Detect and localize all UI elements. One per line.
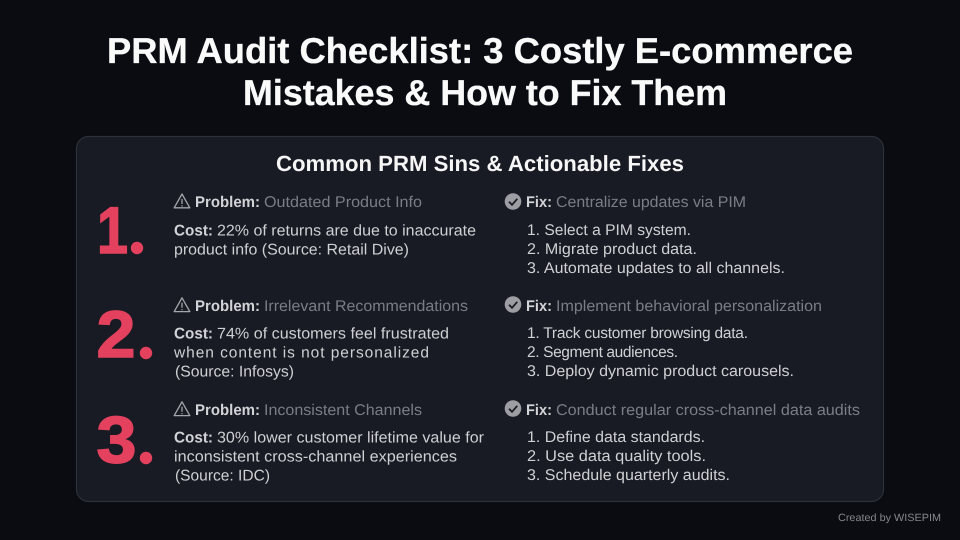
cost text <box>174 222 476 258</box>
fix text: Centralize updates via PIM <box>556 194 746 211</box>
fix text: Conduct regular cross-channel data audits <box>556 402 860 419</box>
cost text: (Source: Infosys) <box>175 364 294 380</box>
fix steps <box>527 429 730 484</box>
row 1 <box>97 193 785 277</box>
fix steps: 3. Schedule quarterly audits. <box>527 467 730 484</box>
cost text: Cost: <box>174 430 213 446</box>
fix text: Fix: <box>526 194 552 211</box>
panel heading: Common PRM Sins & Actionable Fixes <box>276 151 684 176</box>
icon: warning triangle <box>174 298 190 312</box>
cost text <box>174 430 484 484</box>
fix steps: 2. Use data quality tools. <box>527 448 706 465</box>
footer credit: Created by WISEPIM <box>838 512 941 524</box>
fix steps: 1. Define data standards. <box>527 429 705 446</box>
fix steps: 3. Deploy dynamic product carousels. <box>527 363 794 380</box>
problem text: Inconsistent Channels <box>264 402 422 419</box>
fix steps: 2. Migrate product data. <box>527 241 697 258</box>
title <box>107 30 853 113</box>
cost text <box>173 326 449 380</box>
problem text: Problem: <box>195 194 260 211</box>
icon: check circle <box>505 296 521 313</box>
icon: check circle <box>505 193 521 210</box>
problem text: Outdated Product Info <box>264 194 422 211</box>
problem text <box>195 194 422 211</box>
icon: check circle <box>505 400 521 417</box>
cost text: inconsistent cross-channel experiences <box>174 448 457 466</box>
title: PRM Audit Checklist: 3 Costly E-commerce <box>107 30 853 71</box>
cost text: when content is not personalized <box>173 344 429 362</box>
fix text: Fix: <box>526 298 552 315</box>
cost text: 74% of customers feel frustrated <box>217 326 449 342</box>
fix text: Fix: <box>526 402 552 419</box>
fix steps: 2. Segment audiences. <box>527 344 678 361</box>
cost text: Cost: <box>174 222 213 240</box>
icon: warning triangle <box>174 402 190 416</box>
fix steps <box>527 325 794 380</box>
cost text: (Source: IDC) <box>175 468 270 484</box>
number 3 <box>96 402 152 476</box>
number 2 <box>96 297 152 371</box>
title: Mistakes & How to Fix Them <box>243 72 727 113</box>
problem text: Irrelevant Recommendations <box>264 298 468 315</box>
row 2 <box>96 296 822 380</box>
cost text: 22% of returns are due to inaccurate <box>217 222 476 240</box>
problem text: Problem: <box>195 402 260 419</box>
fix steps: 1. Track customer browsing data. <box>527 325 748 342</box>
cost text: Cost: <box>174 326 213 342</box>
number 1: 1 <box>97 193 128 267</box>
fix steps: 1. Select a PIM system. <box>527 222 691 239</box>
panel: common PRM sins and fixes <box>76 136 884 502</box>
fix text: Implement behavioral personalization <box>556 298 822 315</box>
problem text <box>195 402 422 419</box>
cost text: product info (Source: Retail Dive) <box>174 242 409 258</box>
fix steps: 3. Automate updates to all channels. <box>527 260 785 277</box>
problem text: Problem: <box>195 298 260 315</box>
fix steps <box>527 222 785 277</box>
row 3 <box>96 400 860 484</box>
cost text: 30% lower customer lifetime value for <box>217 430 484 446</box>
number 2: 2 <box>96 297 136 371</box>
number 3: 3 <box>96 402 136 476</box>
icon: warning triangle <box>174 194 190 208</box>
